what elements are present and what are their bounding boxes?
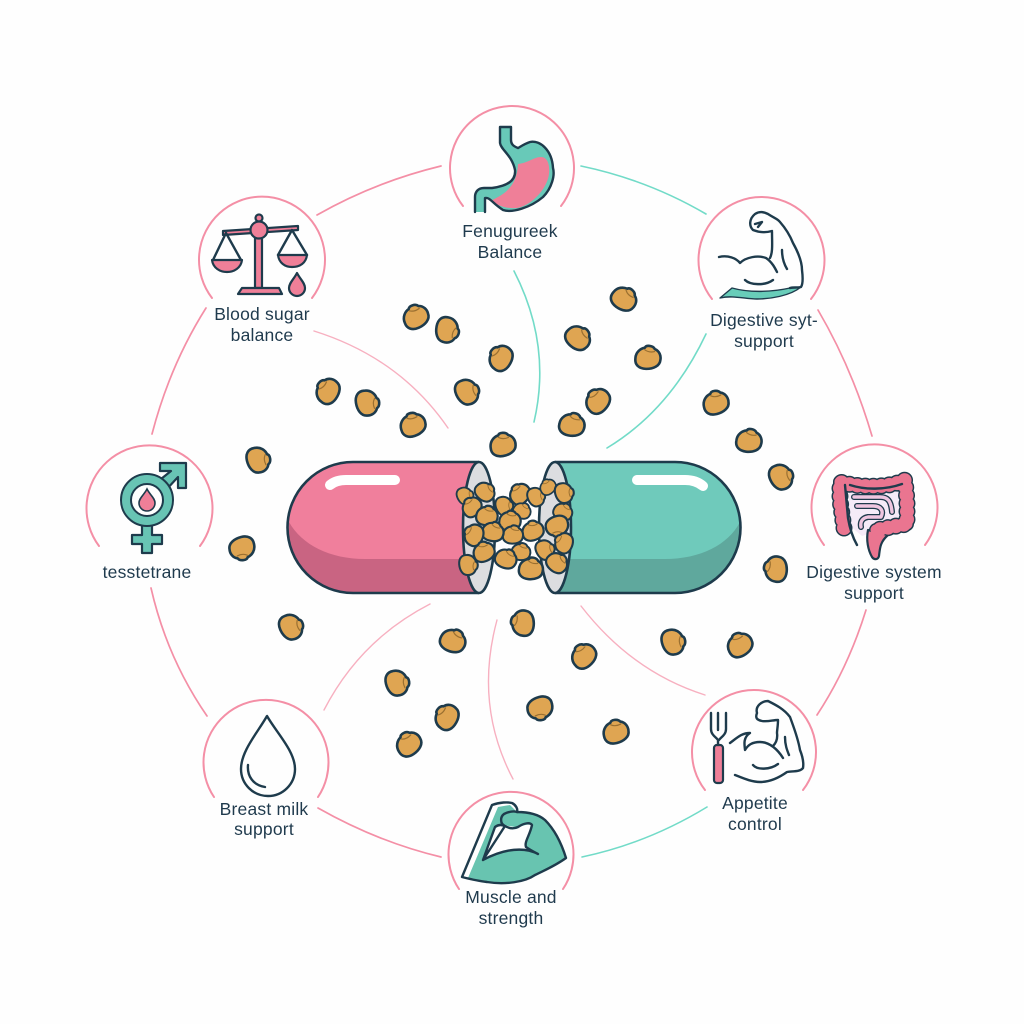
icon: flexed arm — [719, 212, 803, 299]
inner connector lines — [314, 271, 706, 779]
label: strength — [479, 908, 543, 928]
icon: bicep — [462, 802, 566, 883]
label: Fenugureek — [462, 221, 558, 241]
node: flexed arm, Digestive sys support — [698, 197, 824, 351]
icon: fork and flexed arm — [711, 701, 803, 783]
icon: intestines — [840, 480, 907, 559]
node: stomach, Fenugureek Balance — [450, 106, 574, 262]
label: balance — [231, 325, 293, 345]
label: support — [734, 331, 794, 351]
label: Breast milk — [220, 799, 308, 819]
ring — [449, 792, 574, 889]
label: support — [844, 583, 904, 603]
ring — [199, 197, 325, 298]
ring — [450, 106, 574, 206]
seeds spilling from capsule — [455, 476, 577, 581]
label: Balance — [478, 242, 542, 262]
ring — [87, 445, 213, 546]
node: gender symbol, testosterone — [87, 445, 213, 582]
node: drop, Breast milk support — [204, 700, 329, 839]
icon: stomach — [475, 127, 554, 212]
node: intestines, Digestive system support — [806, 444, 942, 603]
ring — [692, 690, 816, 790]
icon: milk drop — [241, 716, 295, 796]
label: control — [728, 814, 782, 834]
label: Blood sugar — [214, 304, 310, 324]
outer connector ring — [151, 166, 872, 857]
capsule right half: teal — [539, 462, 740, 593]
icon: balance scale with drop — [212, 214, 307, 296]
scattered fenugreek seeds — [228, 282, 797, 760]
ring — [204, 700, 329, 797]
label: Digestive syt- — [710, 310, 818, 330]
central split capsule — [288, 462, 740, 593]
ring — [811, 444, 937, 545]
node: scales, Blood sugar balance — [199, 197, 325, 345]
node: bicep, Muscle and strength — [449, 792, 574, 928]
label: Muscle and — [465, 887, 557, 907]
label: support — [234, 819, 294, 839]
node: fork and arm, Appetite control — [692, 690, 816, 834]
ring — [698, 197, 824, 299]
label: Appetite — [722, 793, 788, 813]
capsule left half: pink — [288, 462, 495, 593]
icon: combined gender symbol with drop — [126, 463, 186, 553]
label: tesstetrane — [103, 562, 191, 582]
label: Digestive system — [806, 562, 942, 582]
